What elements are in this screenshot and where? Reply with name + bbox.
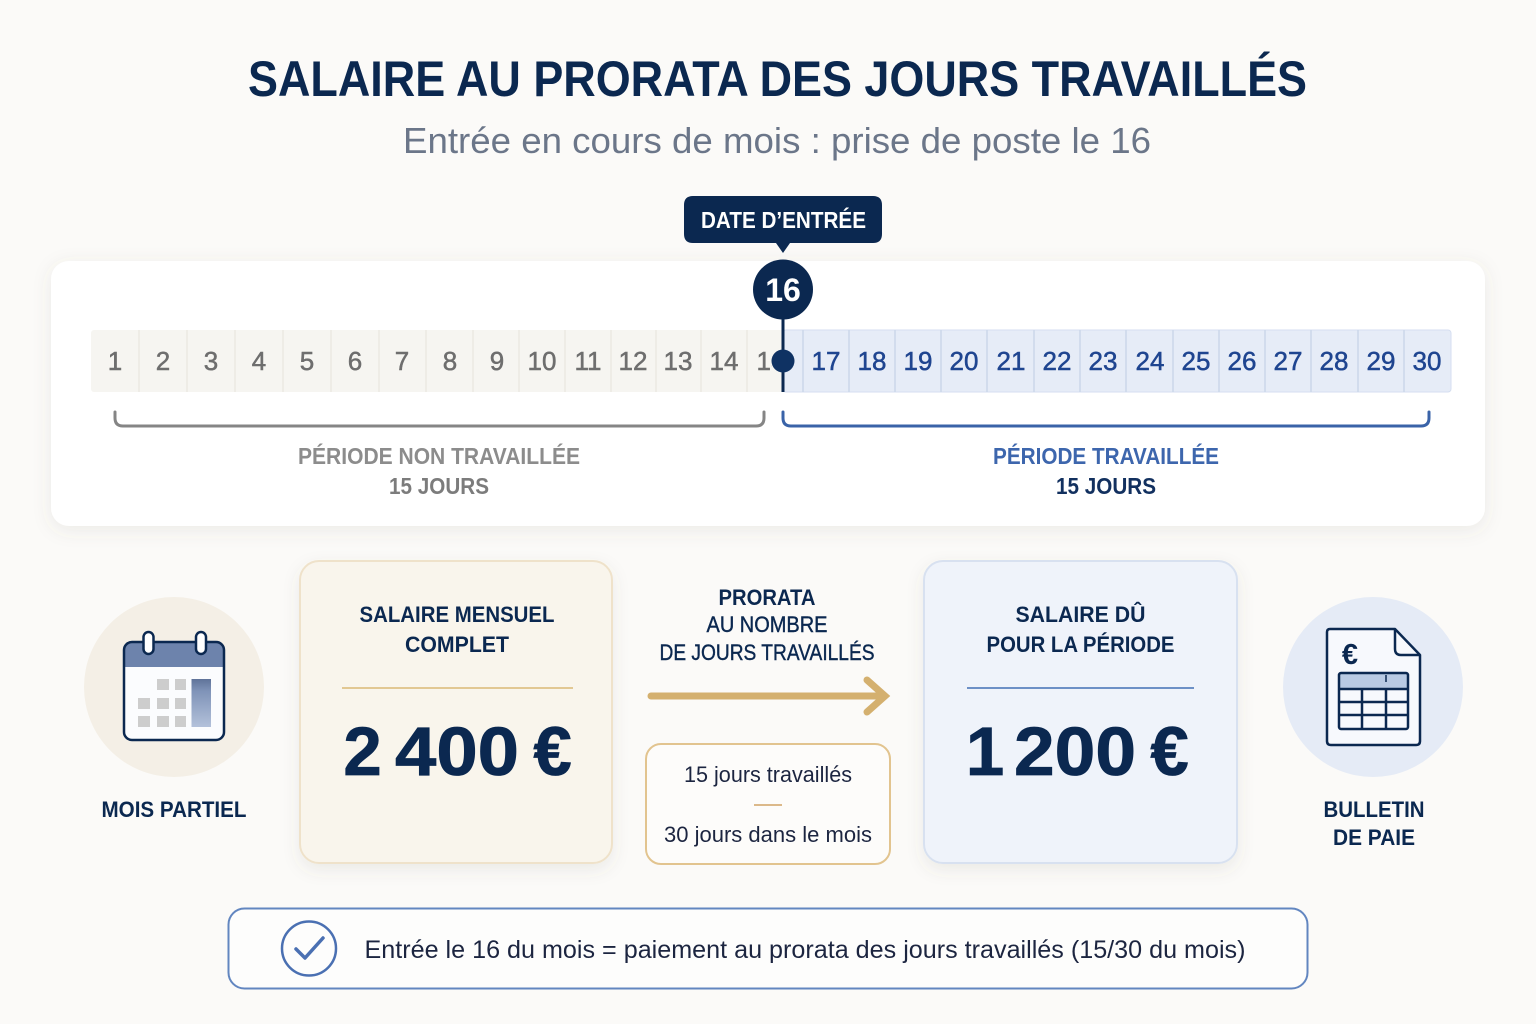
badge: 16 [753,260,813,320]
worked day cells: 26 [1228,346,1256,376]
card: salaire dû: POUR LA PÉRIODE [986,632,1174,657]
subtitle: Entrée en cours de mois : prise de poste le 16 [403,120,1151,161]
fraction box [646,744,890,864]
conclusion bar [228,908,1308,988]
prorata heading: PRORATA [718,585,816,610]
icon: payslip: € [1342,639,1358,671]
prorata heading: AU NOMBRE [706,612,828,637]
label: unworked period [298,442,580,499]
amount: 2 400 €: 2 [343,713,382,790]
card: salaire mensuel: SALAIRE MENSUEL [360,602,555,627]
worked day cells [783,330,1451,392]
callout: date d'entrée: DATE D’ENTRÉE [701,206,866,233]
unworked day cells: 1 [108,346,122,376]
icon: payslip [1283,597,1463,777]
amount: 2 400 € [343,713,572,790]
fraction box: 30 jours dans le mois [664,822,872,847]
callout: date d'entrée [684,196,882,253]
arrow [651,680,885,712]
label: worked period: 15 JOURS [1056,473,1156,499]
label: bulletin de paie [1324,797,1424,850]
label: bulletin de paie: DE PAIE [1333,825,1415,850]
card: salaire dû: SALAIRE DÛ [1016,602,1146,627]
unworked day cells [91,330,791,392]
amount: 1 200 €: 200 [1014,713,1136,790]
unworked day cells: 7 [395,346,409,376]
prorata heading [660,585,874,665]
worked day cells: 25 [1182,346,1210,376]
entry date marker [684,196,882,392]
worked day cells: 30 [1413,346,1441,376]
worked day cells: 28 [1320,346,1348,376]
amount: 1 200 €: € [1150,713,1189,790]
bracket: unworked period [115,412,764,426]
worked day cells: 29 [1367,346,1395,376]
card: salaire mensuel: COMPLET [405,632,509,657]
badge: 16: 16 [765,272,801,308]
unworked day cells: 9 [490,346,504,376]
unworked day cells: 14 [710,346,738,376]
worked day cells: 24 [1136,346,1164,376]
worked day cells: 21 [997,346,1025,376]
fraction box: 15 jours travaillés [684,762,852,787]
amount: 1 200 € [966,713,1189,790]
unworked day cells: 11 [574,346,602,376]
unworked day cells: 13 [664,346,692,376]
marker dot [772,350,794,372]
icon: calendar [84,597,264,777]
label: unworked period: PÉRIODE NON TRAVAILLÉE [298,442,580,469]
label: worked period [993,442,1219,499]
label: unworked period: 15 JOURS [389,473,489,499]
icon: check [282,922,336,976]
amount: 2 400 €: € [533,713,572,790]
panel: timeline [51,261,1485,526]
unworked day cells: 4 [252,346,266,376]
label: mois partiel: MOIS PARTIEL [102,797,246,822]
unworked day cells: 10 [528,346,556,376]
unworked day cells: 3 [204,346,218,376]
label: bulletin de paie: BULLETIN [1324,797,1424,822]
unworked day cells: 2 [156,346,170,376]
worked day cells: 17 [812,346,840,376]
amount: 2 400 €: 400 [395,713,519,790]
worked day cells: 20 [950,346,978,376]
unworked day cells: 5 [300,346,314,376]
amount: 1 200 €: 1 [966,713,1004,790]
worked day cells: 27 [1274,346,1302,376]
marker line [782,315,784,392]
unworked day cells: 12 [619,346,647,376]
conclusion bar: Entrée le 16 du mois = paiement au prorata des jours travaillés (15/30 du mois) [364,936,1246,964]
label: worked period: PÉRIODE TRAVAILLÉE [993,442,1219,469]
bracket: worked period [783,412,1429,426]
worked day cells: 22 [1043,346,1071,376]
prorata heading: DE JOURS TRAVAILLÉS [660,640,874,665]
card: salaire mensuel [300,561,612,863]
worked day cells: 19 [904,346,932,376]
card: salaire dû [924,561,1237,863]
title: SALAIRE AU PRORATA DES JOURS TRAVAILLÉS [248,51,1307,107]
unworked day cells: 8 [443,346,457,376]
unworked day cells: 6 [348,346,362,376]
worked day cells: 18 [858,346,886,376]
unworked day cells: 15 [757,346,785,376]
worked day cells: 23 [1089,346,1117,376]
